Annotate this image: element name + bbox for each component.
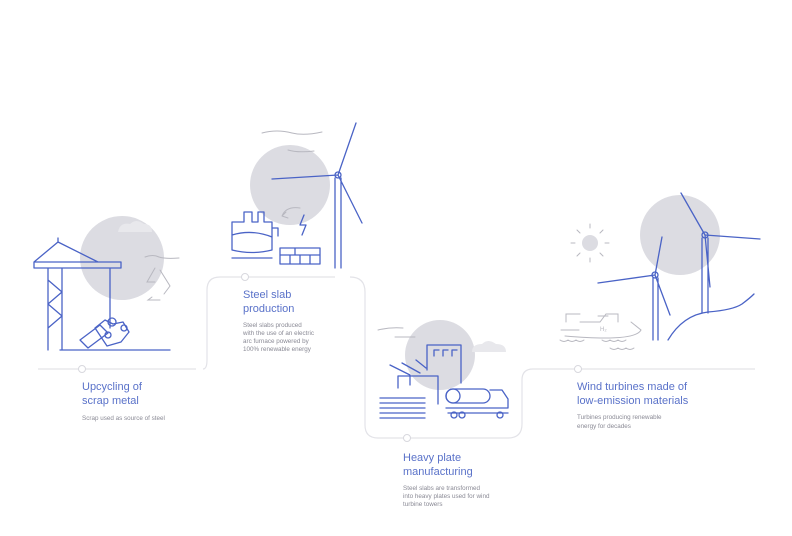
icon: wind turbines (560, 193, 760, 350)
text: step 4: low-emission materials (577, 395, 689, 407)
text: step 2: Steel slab (243, 289, 291, 301)
text: step 2: with the use of an electric (242, 330, 314, 337)
icon: wind turbines: H₂ (600, 327, 607, 333)
icon: steel slab production (232, 123, 362, 268)
text: step 4: energy for decades (577, 423, 631, 430)
text: step 3: turbine towers (403, 501, 443, 508)
text: step 2: Steel slabs produced (243, 322, 302, 329)
text: step 3 (403, 452, 490, 508)
text: step 2: 100% renewable energy (243, 346, 312, 353)
text: step 1 (82, 381, 165, 422)
text: step 4 (577, 381, 689, 430)
text: step 3: Steel slabs are transformed (403, 485, 480, 492)
text: step 3: into heavy plates used for wind (403, 493, 490, 500)
text: step 4: Turbines producing renewable (577, 414, 662, 421)
text: step 1: Scrap used as source of steel (82, 415, 165, 422)
text: step 2: production (243, 303, 294, 315)
text: step 1: Upcycling of (82, 381, 143, 393)
text: step 3: Heavy plate (403, 452, 461, 464)
text: step 2 (242, 289, 314, 353)
icon: heavy plate factory (378, 320, 508, 418)
icon: scrap metal crane (34, 216, 179, 350)
text: step 1: scrap metal (82, 395, 139, 407)
text: step 4: Wind turbines made of (577, 381, 688, 393)
flow path (38, 274, 755, 442)
text: step 2: arc furnace powered by (243, 338, 310, 345)
text: step 3: manufacturing (403, 466, 473, 478)
